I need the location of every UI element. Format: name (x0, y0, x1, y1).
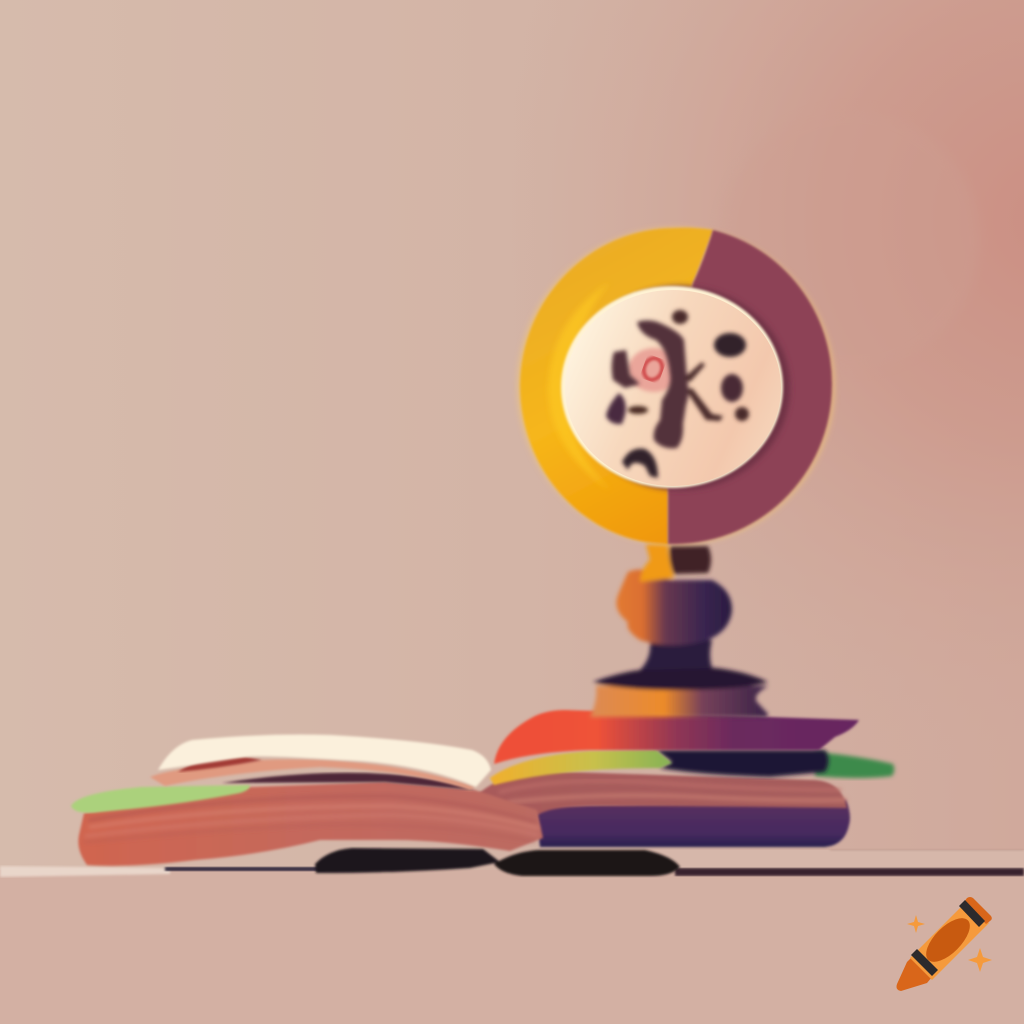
faint background circle (720, 110, 980, 370)
sparkles (907, 915, 925, 933)
center disc (565, 290, 781, 486)
red center ring (641, 356, 665, 382)
right page stripes (500, 781, 845, 802)
peach under sheets (150, 759, 475, 790)
disc shadow (570, 286, 790, 490)
under-page shadow (222, 773, 474, 790)
icon: crayon logo (896, 897, 992, 991)
open book (71, 710, 894, 876)
yellow half ring (520, 228, 713, 544)
lamp stand (590, 544, 768, 717)
stand collar (670, 546, 711, 574)
green strip tip (815, 752, 894, 778)
right page block: pink band (477, 771, 847, 815)
left page block (78, 782, 543, 866)
maroon half ring (668, 230, 832, 544)
stand neck (640, 640, 712, 670)
floor horizon line (0, 849, 1024, 877)
dark strip (656, 750, 828, 777)
crayon tip (896, 957, 932, 991)
left page stripes (85, 796, 538, 842)
red inner page (178, 757, 262, 772)
crayon oval (919, 911, 977, 969)
stand disc (593, 666, 768, 690)
pink center blob (628, 348, 680, 392)
orange neck drip (640, 544, 674, 582)
green left cover (71, 785, 250, 813)
crayon bands (911, 949, 938, 976)
crayon cap (964, 897, 992, 924)
map blotches (606, 310, 749, 478)
glow (517, 227, 835, 545)
crayon body (910, 901, 989, 980)
left open page (158, 735, 491, 787)
stand skirt (590, 686, 768, 717)
right green strip (490, 750, 672, 785)
cream rim (561, 286, 783, 488)
book feet shadows (315, 848, 680, 876)
stand bulb (616, 570, 732, 645)
globe (517, 227, 835, 545)
bright inner yellow crescent (548, 282, 610, 490)
right page block: purple (535, 800, 850, 847)
top closed book (494, 710, 859, 764)
floor (0, 870, 1024, 1024)
